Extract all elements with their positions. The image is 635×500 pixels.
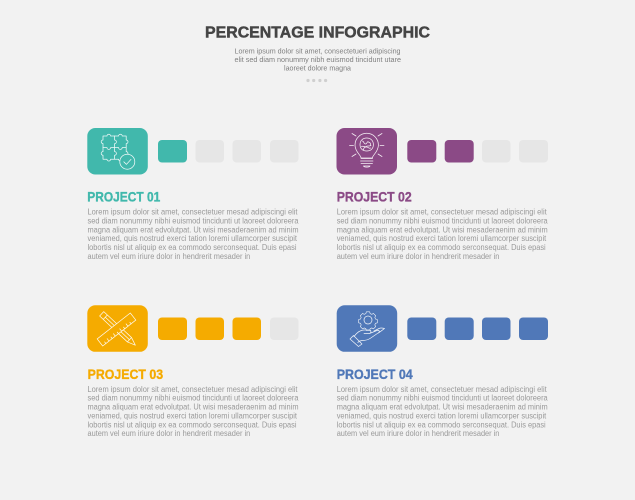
- body text: Lorem ipsum dolor sit amet, consectetuer mesad adipiscingi elit: [88, 385, 298, 394]
- body text: magna aliquam erat edvolutpat. Ut wisi mesaderaenim ad minim: [88, 403, 299, 412]
- body text: autem vel eum iriure dolor in hendrerit mesader in: [88, 252, 250, 261]
- body text: veniamed, quis nostrud exerci tation loremi ullamcorper suscipit: [88, 234, 298, 243]
- body text: sed diam nonummy nibhi euismod tincidunti ut laoreet doloreera: [88, 216, 299, 225]
- heading: PROJECT 02: [337, 189, 412, 205]
- subtitle text: Lorem ipsum dolor sit amet, consectetueri adipiscing: [234, 46, 400, 56]
- body text: [88, 208, 299, 261]
- body text: magna aliquam erat edvolutpat. Ut wisi mesaderaenim ad minim: [88, 225, 299, 234]
- icon tile: hand holding gear: [337, 305, 397, 352]
- subtitle text: [234, 46, 401, 72]
- body text: lobortis nisl ut aliquip ex ea commodo serconsequat. Duis epasi: [337, 243, 546, 252]
- decorative dots: [306, 79, 327, 82]
- panel: project 04: [337, 305, 548, 438]
- body text: veniamed, quis nostrud exerci tation loremi ullamcorper suscipit: [337, 234, 547, 243]
- body text: autem vel eum iriure dolor in hendrerit mesader in: [88, 429, 250, 438]
- body text: autem vel eum iriure dolor in hendrerit mesader in: [337, 252, 499, 261]
- body text: sed diam nonummy nibhi euismod tincidunti ut laoreet doloreera: [337, 216, 548, 225]
- body text: veniamed, quis nostrud exerci tation loremi ullamcorper suscipit: [337, 411, 547, 420]
- body text: sed diam nonummy nibhi euismod tincidunti ut laoreet doloreera: [88, 394, 299, 403]
- subtitle text: laoreet dolore magna: [284, 64, 352, 72]
- body text: lobortis nisl ut aliquip ex ea commodo serconsequat. Duis epasi: [337, 420, 546, 429]
- body text: lobortis nisl ut aliquip ex ea commodo serconsequat. Duis epasi: [88, 243, 297, 252]
- icon tile: puzzle with check: [87, 128, 148, 174]
- body text: [337, 208, 548, 261]
- title: PERCENTAGE INFOGRAPHIC: [205, 24, 430, 41]
- body text: [88, 385, 299, 438]
- body text: veniamed, quis nostrud exerci tation loremi ullamcorper suscipit: [88, 411, 298, 420]
- body text: Lorem ipsum dolor sit amet, consectetuer mesad adipiscingi elit: [337, 385, 547, 394]
- heading: PROJECT 04: [337, 366, 413, 382]
- progress squares: 1 of 4: [158, 140, 298, 162]
- heading: PROJECT 03: [88, 366, 163, 382]
- panel: project 01: [87, 128, 299, 261]
- body text: Lorem ipsum dolor sit amet, consectetuer mesad adipiscingi elit: [88, 208, 298, 216]
- body text: [337, 385, 548, 438]
- body text: magna aliquam erat edvolutpat. Ut wisi mesaderaenim ad minim: [337, 403, 548, 412]
- progress squares: 4 of 4: [407, 318, 548, 340]
- subtitle text: elit sed diam nonummy nibh euismod tincidunt utare: [234, 55, 401, 64]
- progress squares: 3 of 4: [158, 318, 298, 340]
- icon tile: light bulb with brain: [336, 128, 397, 174]
- body text: lobortis nisl ut aliquip ex ea commodo serconsequat. Duis epasi: [88, 420, 297, 429]
- body text: magna aliquam erat edvolutpat. Ut wisi mesaderaenim ad minim: [337, 225, 548, 234]
- heading: PROJECT 01: [87, 189, 160, 205]
- panel: project 02: [336, 128, 548, 261]
- body text: sed diam nonummy nibhi euismod tincidunti ut laoreet doloreera: [337, 394, 548, 403]
- panel: project 03: [87, 305, 299, 438]
- icon tile: crossed ruler and pencil: [87, 305, 148, 352]
- progress squares: 2 of 4: [407, 140, 548, 162]
- body text: autem vel eum iriure dolor in hendrerit mesader in: [337, 429, 499, 438]
- body text: Lorem ipsum dolor sit amet, consectetuer mesad adipiscingi elit: [337, 208, 547, 216]
